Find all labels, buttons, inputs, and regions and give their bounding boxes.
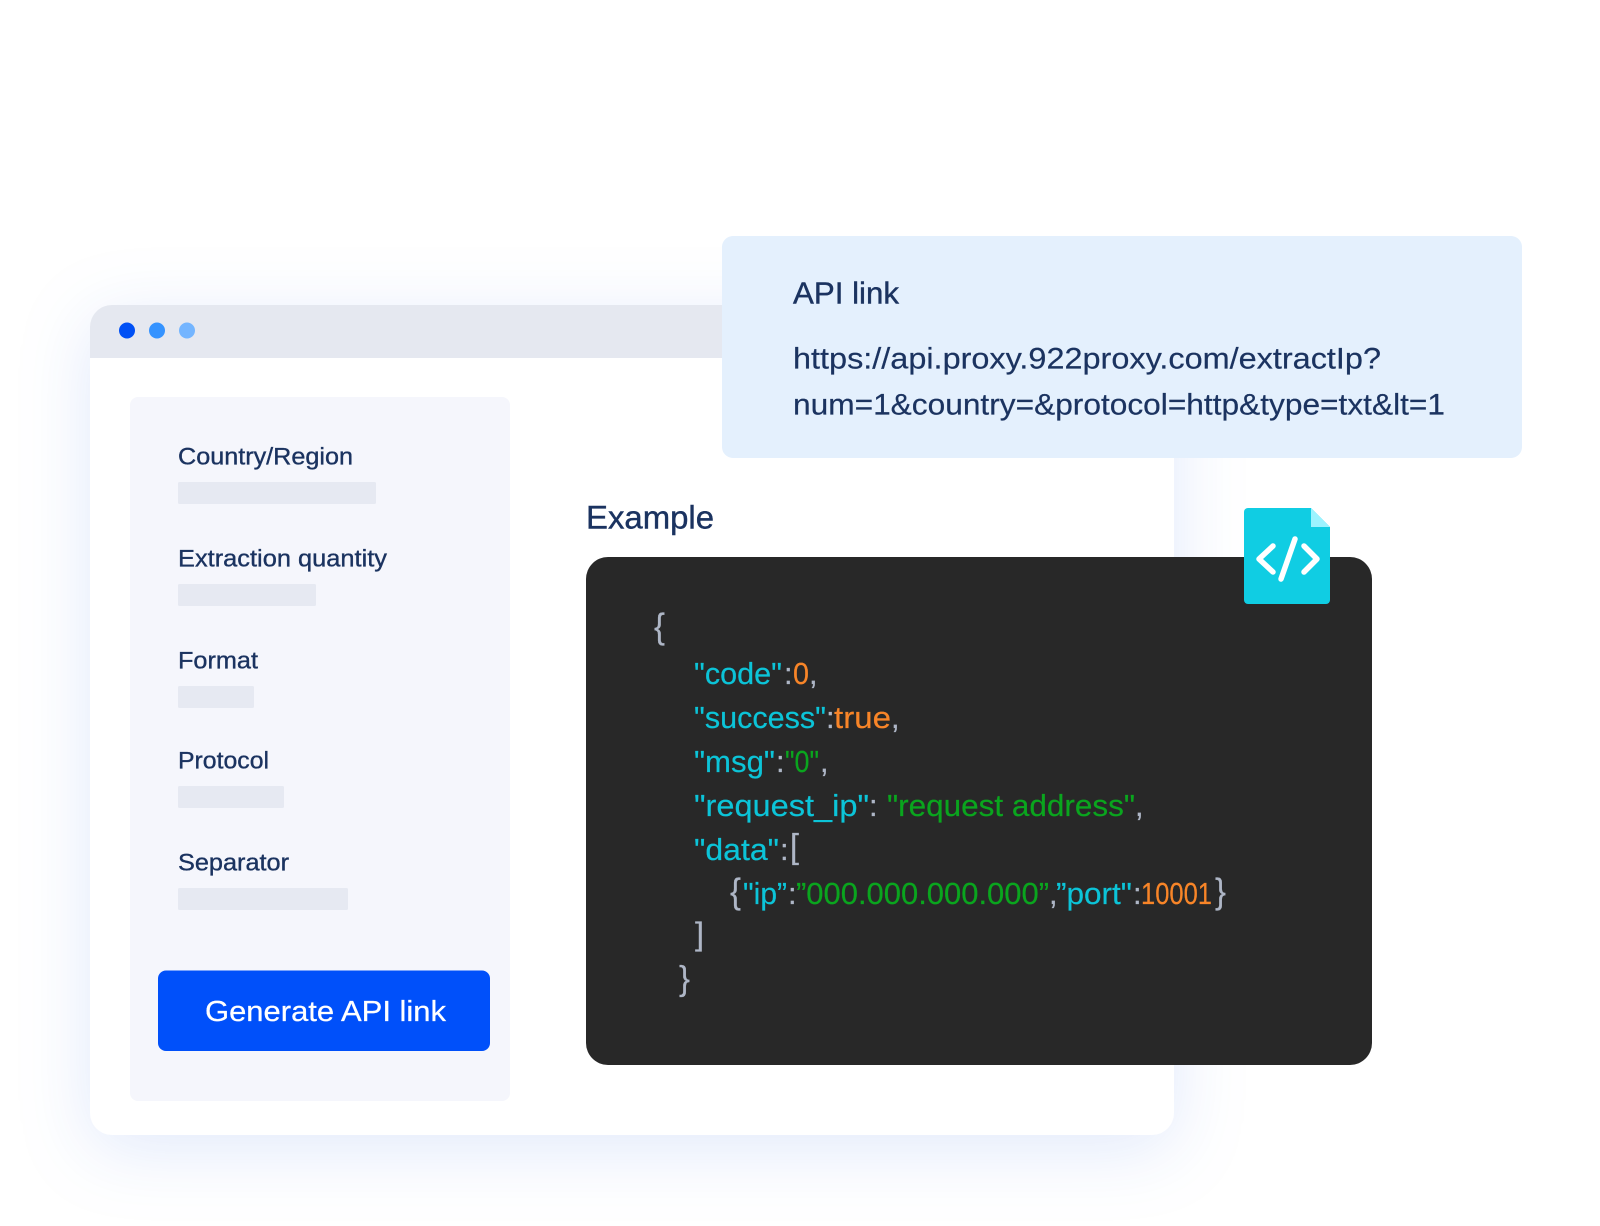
field: Protocol — [178, 748, 284, 808]
code line: opening brace: { — [654, 607, 665, 646]
code line: ip and port — [730, 872, 1226, 911]
API link heading: API link — [793, 276, 899, 310]
code line: ip and port: , — [1049, 876, 1058, 911]
window title bar — [90, 305, 1174, 358]
code line: msg: "0" — [785, 744, 819, 779]
code line: success — [694, 700, 900, 735]
code line: request_ip: : — [869, 788, 878, 823]
field: Separator — [178, 850, 348, 910]
code line: request_ip: "request_ip" — [694, 788, 869, 823]
API link background — [722, 236, 1522, 458]
code line: code: "code" — [694, 656, 782, 691]
field: Country/Region — [178, 444, 376, 504]
code line: ip and port: ”000.000.000.000” — [796, 876, 1049, 911]
panel: code sample — [586, 557, 1372, 1065]
code line: ip and port: : — [788, 876, 797, 911]
form background — [130, 397, 510, 1101]
code line: request_ip — [694, 788, 1144, 823]
icon: code file — [1244, 508, 1330, 604]
code line: ip and port: : — [1133, 876, 1142, 911]
code line: success: : — [826, 700, 835, 735]
field: Separator: Separator — [178, 850, 289, 876]
code line: msg: : — [776, 744, 785, 779]
API link URL: num=1&country=&protocol=http&type=txt&lt=1 — [793, 388, 1445, 422]
code line: data: "data" — [694, 832, 779, 867]
code line: data: : — [780, 832, 789, 867]
code line: msg — [694, 744, 829, 779]
code line: code: , — [809, 656, 818, 691]
panel: browser window — [90, 305, 1174, 1135]
code line: msg: "msg" — [694, 744, 775, 779]
code line: request_ip: , — [1135, 788, 1144, 823]
code line: ip and port: 10001 — [1141, 876, 1212, 911]
field: Country/Region: Country/Region — [178, 444, 353, 470]
code line: code: 0 — [793, 656, 809, 691]
code line: code: : — [784, 656, 793, 691]
code line: success: true — [834, 700, 891, 735]
panel: form — [130, 397, 510, 1101]
code line: msg: , — [820, 744, 829, 779]
code line: closing brace: } — [679, 960, 690, 998]
API link URL: https://api.proxy.922proxy.com/extractIp? — [793, 342, 1381, 376]
field: Format — [178, 648, 258, 708]
panel: API link — [722, 236, 1522, 458]
code line: ip and port: { — [730, 872, 741, 911]
API link URL — [793, 342, 1445, 422]
code line: ip and port: "ip” — [743, 876, 787, 911]
code line: request_ip: "request address" — [887, 788, 1135, 823]
window control dots — [119, 322, 195, 338]
code line: ip and port: } — [1215, 872, 1226, 911]
heading: Example: Example — [586, 500, 714, 536]
code line: success: , — [891, 700, 900, 735]
field: Extraction quantity — [178, 546, 387, 606]
button: Generate API link: Generate API link — [205, 996, 447, 1028]
code line: data: [ — [790, 828, 800, 866]
field: Format: Format — [178, 648, 258, 674]
code line: ip and port: ”port" — [1056, 876, 1132, 911]
code line: success: "success" — [694, 700, 826, 735]
field: Protocol: Protocol — [178, 748, 269, 774]
code background — [586, 557, 1372, 1065]
button: Generate API link — [158, 970, 490, 1051]
code line: closing bracket: ] — [695, 916, 704, 952]
field: Extraction quantity: Extraction quantity — [178, 546, 387, 572]
window body with shadow — [90, 305, 1174, 1135]
